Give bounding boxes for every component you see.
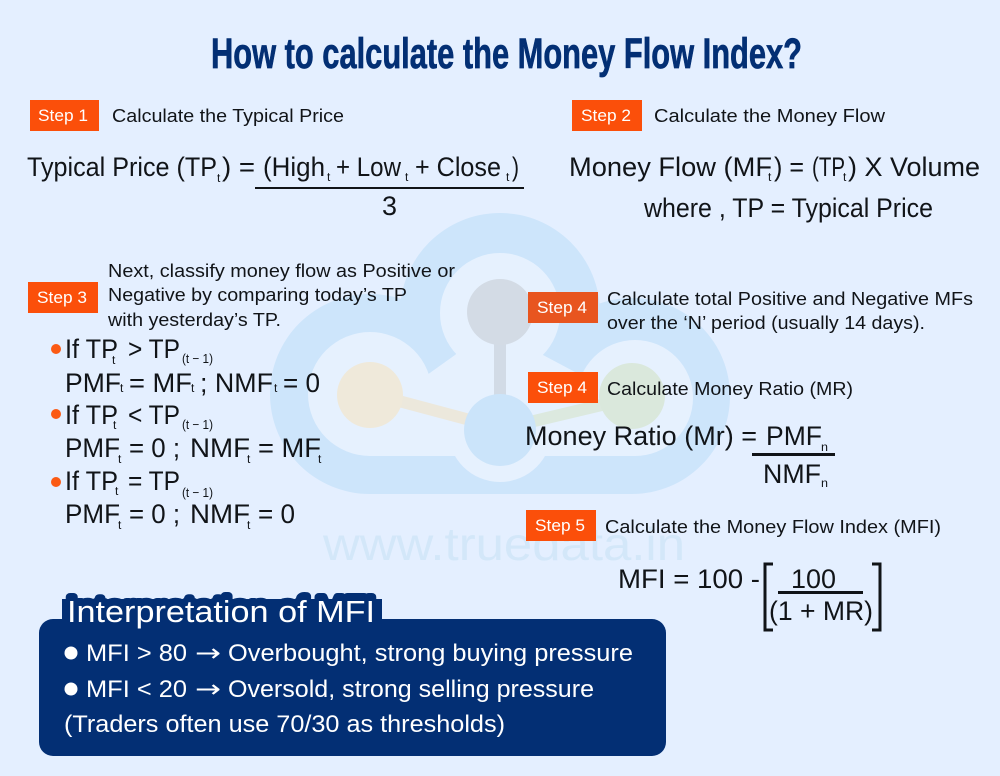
overbought rule: →: [195, 639, 221, 667]
money flow formula: t: [843, 170, 847, 184]
typical price formula: [27, 152, 524, 221]
typical price formula: (High: [263, 152, 325, 182]
step 4 description: over the ‘N’ period (usually 14 days).: [607, 313, 925, 333]
condition: TP greater than yesterday: t: [112, 353, 116, 367]
money flow formula: ) =: [774, 152, 804, 182]
step 5 badge: [526, 510, 596, 541]
condition: TP less than yesterday: t: [247, 452, 251, 466]
typical price formula: ): [512, 152, 519, 182]
condition: TP equal to yesterday: (t − 1): [182, 485, 213, 500]
step 3 badge: Step 3: [37, 288, 87, 307]
condition: TP greater than yesterday: ; NMF: [200, 368, 273, 398]
step 3 description: [107, 261, 455, 330]
oversold rule: →: [195, 675, 221, 703]
MFI formula: [618, 564, 880, 630]
step 4 badge: [528, 292, 598, 323]
oversold rule: MFI < 20: [86, 676, 187, 703]
typical price formula: Typical Price (TP: [27, 152, 217, 182]
money flow formula: [569, 152, 980, 184]
step 1 description: Calculate the Typical Price: [112, 106, 344, 126]
money flow formula: (TP: [812, 152, 845, 182]
condition: TP equal to yesterday: = TP: [128, 466, 180, 496]
condition: TP less than yesterday: (t − 1): [182, 417, 213, 432]
step 4 description: [607, 289, 973, 333]
step 3 badge: [28, 282, 98, 313]
condition: TP greater than yesterday: > TP: [128, 334, 180, 364]
step 2 description: Calculate the Money Flow: [654, 106, 886, 126]
money flow formula: t: [768, 170, 772, 184]
typical price formula: t: [506, 170, 510, 184]
overbought rule: MFI > 80: [86, 640, 187, 667]
step 2 badge: [572, 100, 642, 131]
condition: TP greater than yesterday: t: [191, 381, 195, 395]
condition: TP greater than yesterday: = 0: [283, 368, 320, 398]
money ratio description: Calculate Money Ratio (MR): [607, 379, 853, 399]
condition: TP equal to yesterday: = 0: [258, 499, 295, 529]
condition: TP less than yesterday: t: [113, 418, 117, 432]
money ratio formula: NMF: [763, 459, 821, 489]
money ratio formula: n: [821, 476, 828, 490]
step 1 badge: [30, 100, 99, 131]
MFI formula: (1 + MR): [769, 596, 873, 626]
money flow formula: ) X Volume: [848, 152, 980, 182]
condition: TP less than yesterday: t: [118, 452, 122, 466]
money ratio badge: [528, 372, 598, 403]
step 5 description: Calculate the Money Flow Index (MFI): [605, 517, 941, 537]
step 3 description: with yesterday’s TP.: [107, 310, 281, 330]
oversold rule: [64, 675, 594, 703]
typical price formula: 3: [382, 191, 397, 221]
step 3 description: Next, classify money flow as Positive or: [108, 261, 455, 281]
condition: TP equal to yesterday: t: [118, 518, 122, 532]
panel: step 3: [28, 261, 455, 532]
condition: TP equal to yesterday: t: [115, 484, 119, 498]
typical price formula: t: [217, 171, 221, 185]
typical price formula: ) =: [222, 152, 255, 182]
condition: TP greater than yesterday: t: [120, 381, 124, 395]
condition: TP greater than yesterday: PMF: [65, 368, 121, 398]
condition: TP equal to yesterday: t: [247, 518, 251, 532]
MFI formula: 100: [791, 564, 836, 594]
panel heading: Interpretation of MFI: [67, 594, 375, 629]
step 4 description: Calculate total Positive and Negative MFs: [607, 289, 973, 309]
condition: TP less than yesterday: If TP: [65, 400, 118, 430]
overbought rule: [64, 639, 633, 667]
panel: step 1: [27, 100, 524, 221]
condition: TP greater than yesterday: = MF: [129, 368, 192, 398]
overbought rule: Overbought, strong buying pressure: [228, 640, 633, 667]
condition: TP less than yesterday: = 0 ;: [129, 433, 180, 463]
MFI formula: MFI = 100 -: [618, 564, 760, 594]
condition: TP less than yesterday: t: [318, 452, 322, 466]
condition: TP equal to yesterday: NMF: [190, 499, 250, 529]
condition: TP less than yesterday: PMF: [65, 433, 120, 463]
typical price formula: t: [327, 170, 331, 184]
oversold rule: Oversold, strong selling pressure: [228, 676, 594, 703]
thresholds note: (Traders often use 70/30 as thresholds): [64, 711, 505, 738]
money ratio formula: PMF: [766, 421, 822, 451]
money ratio badge: Step 4: [537, 378, 587, 397]
step 3 description: Negative by comparing today’s TP: [108, 285, 407, 305]
money ratio formula: [525, 421, 835, 490]
panel: step 5: [526, 510, 941, 630]
typical price note: where , TP = Typical Price: [643, 193, 933, 223]
panel heading: Interpretation of MFI: [67, 590, 375, 625]
condition: TP less than yesterday: < TP: [128, 400, 180, 430]
condition: TP less than yesterday: = MF: [258, 433, 321, 463]
step 5 badge: Step 5: [535, 516, 585, 535]
condition: TP greater than yesterday: (t − 1): [182, 351, 213, 366]
typical price formula: + Close: [415, 152, 501, 182]
condition: TP equal to yesterday: If TP: [65, 466, 118, 496]
condition: TP equal to yesterday: PMF: [65, 499, 120, 529]
watermark: cloud logo: [270, 213, 730, 494]
step 2 badge: Step 2: [581, 106, 631, 125]
panel background: [39, 619, 666, 756]
money ratio formula: Money Ratio (Mr) =: [525, 421, 757, 451]
condition: TP equal to yesterday: [51, 466, 295, 532]
money ratio formula: n: [821, 440, 828, 454]
condition: TP greater than yesterday: If TP: [65, 334, 118, 364]
panel: step 4 total flows: [528, 289, 973, 333]
condition: TP greater than yesterday: t: [274, 381, 278, 395]
money flow formula: Money Flow (MF: [569, 152, 772, 182]
typical price formula: + Low: [336, 152, 401, 182]
typical price formula: t: [405, 170, 409, 184]
condition: TP less than yesterday: NMF: [190, 433, 250, 463]
panel: step 2: [569, 100, 980, 223]
condition: TP less than yesterday: [51, 400, 322, 466]
watermark: website address: www.truedata.in: [322, 518, 685, 570]
step 1 badge: Step 1: [38, 106, 88, 125]
panel: step 4 money ratio: [525, 372, 853, 490]
step 4 badge: Step 4: [537, 298, 587, 317]
condition: TP equal to yesterday: = 0 ;: [129, 499, 180, 529]
condition: TP greater than yesterday: [51, 334, 320, 398]
panel: interpretation of MFI: [39, 590, 666, 756]
